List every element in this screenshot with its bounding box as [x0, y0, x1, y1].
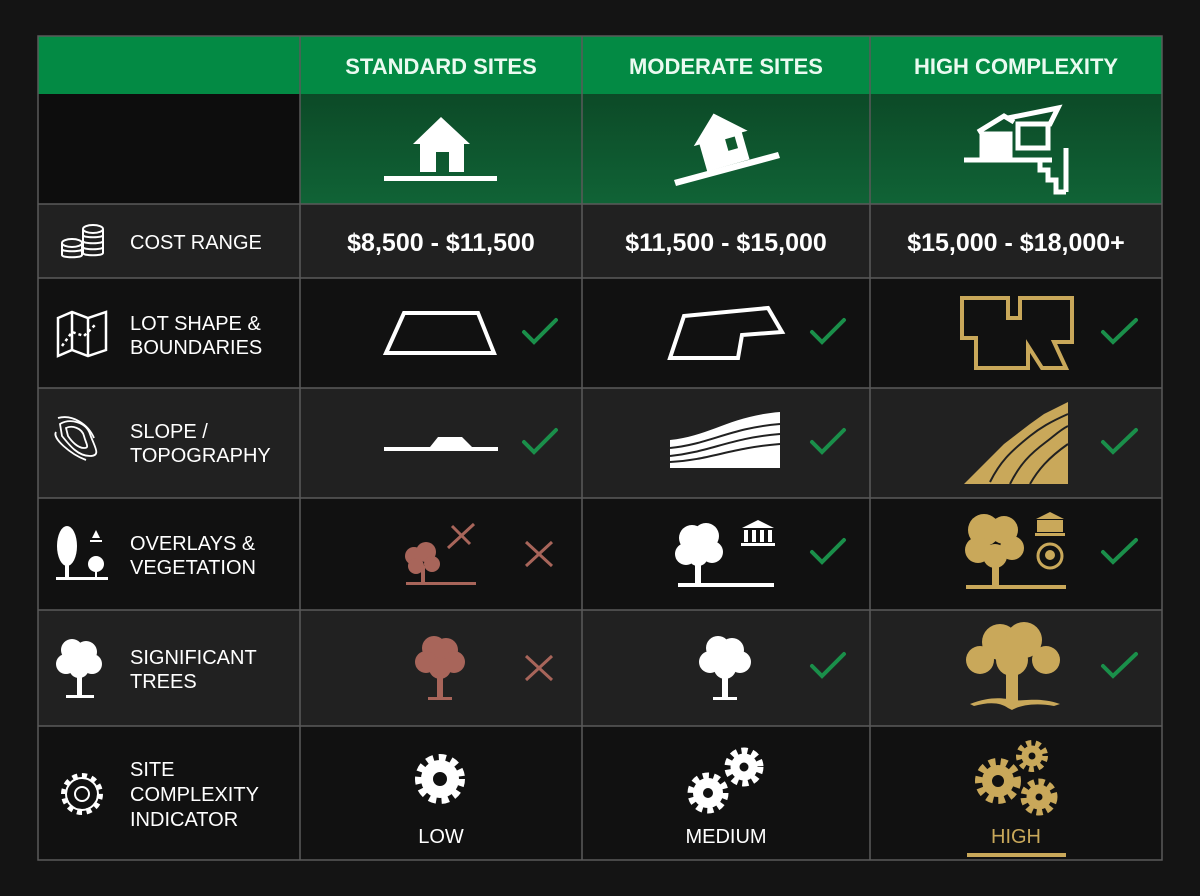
cost values: [347, 229, 1125, 257]
column headings: [345, 54, 1118, 79]
row label: cost range: [62, 225, 262, 257]
column headings: MODERATE SITES: [629, 54, 823, 79]
icon: flat house: [384, 117, 497, 181]
cost values: $11,500 - $15,000: [625, 229, 827, 257]
row label: slope: [55, 417, 271, 467]
cost values: $8,500 - $11,500: [347, 229, 535, 257]
row label: significant trees: SIGNIFICANT: [130, 647, 257, 669]
icon: complex house: [964, 108, 1066, 192]
row label: slope: TOPOGRAPHY: [130, 445, 271, 467]
row label: site complexity: [64, 759, 259, 831]
complexity gears: HIGH: [991, 826, 1041, 848]
complexity gears: MEDIUM: [685, 826, 767, 848]
row label: lot shape: [58, 312, 262, 359]
column headings: STANDARD SITES: [345, 54, 537, 79]
row label: site complexity: INDICATOR: [130, 809, 238, 831]
row label: cost range: COST RANGE: [130, 232, 262, 254]
lot shapes: [386, 298, 1072, 368]
row label: lot shape: LOT SHAPE &: [130, 313, 261, 335]
column headings: HIGH COMPLEXITY: [914, 54, 1118, 79]
row label: site complexity: COMPLEXITY: [130, 784, 259, 806]
overlays icons: [405, 512, 1136, 589]
row label: overlays: VEGETATION: [130, 557, 256, 579]
slope icons: [384, 402, 1068, 484]
row label: slope: SLOPE /: [130, 421, 208, 443]
checks rows lot & slope: [524, 320, 1136, 452]
row label: significant trees: [56, 639, 257, 698]
trees icons: [415, 622, 1136, 710]
complexity gears: LOW: [418, 826, 464, 848]
row label: significant trees: TREES: [130, 671, 197, 693]
icon: sloped house: [674, 106, 780, 186]
row label: lot shape: BOUNDARIES: [130, 337, 262, 359]
row label: overlays: [56, 526, 256, 580]
row label: overlays: OVERLAYS &: [130, 533, 256, 555]
row label: site complexity: SITE: [130, 759, 174, 781]
cost values: $15,000 - $18,000+: [907, 229, 1125, 257]
complexity gears: [418, 743, 1066, 857]
